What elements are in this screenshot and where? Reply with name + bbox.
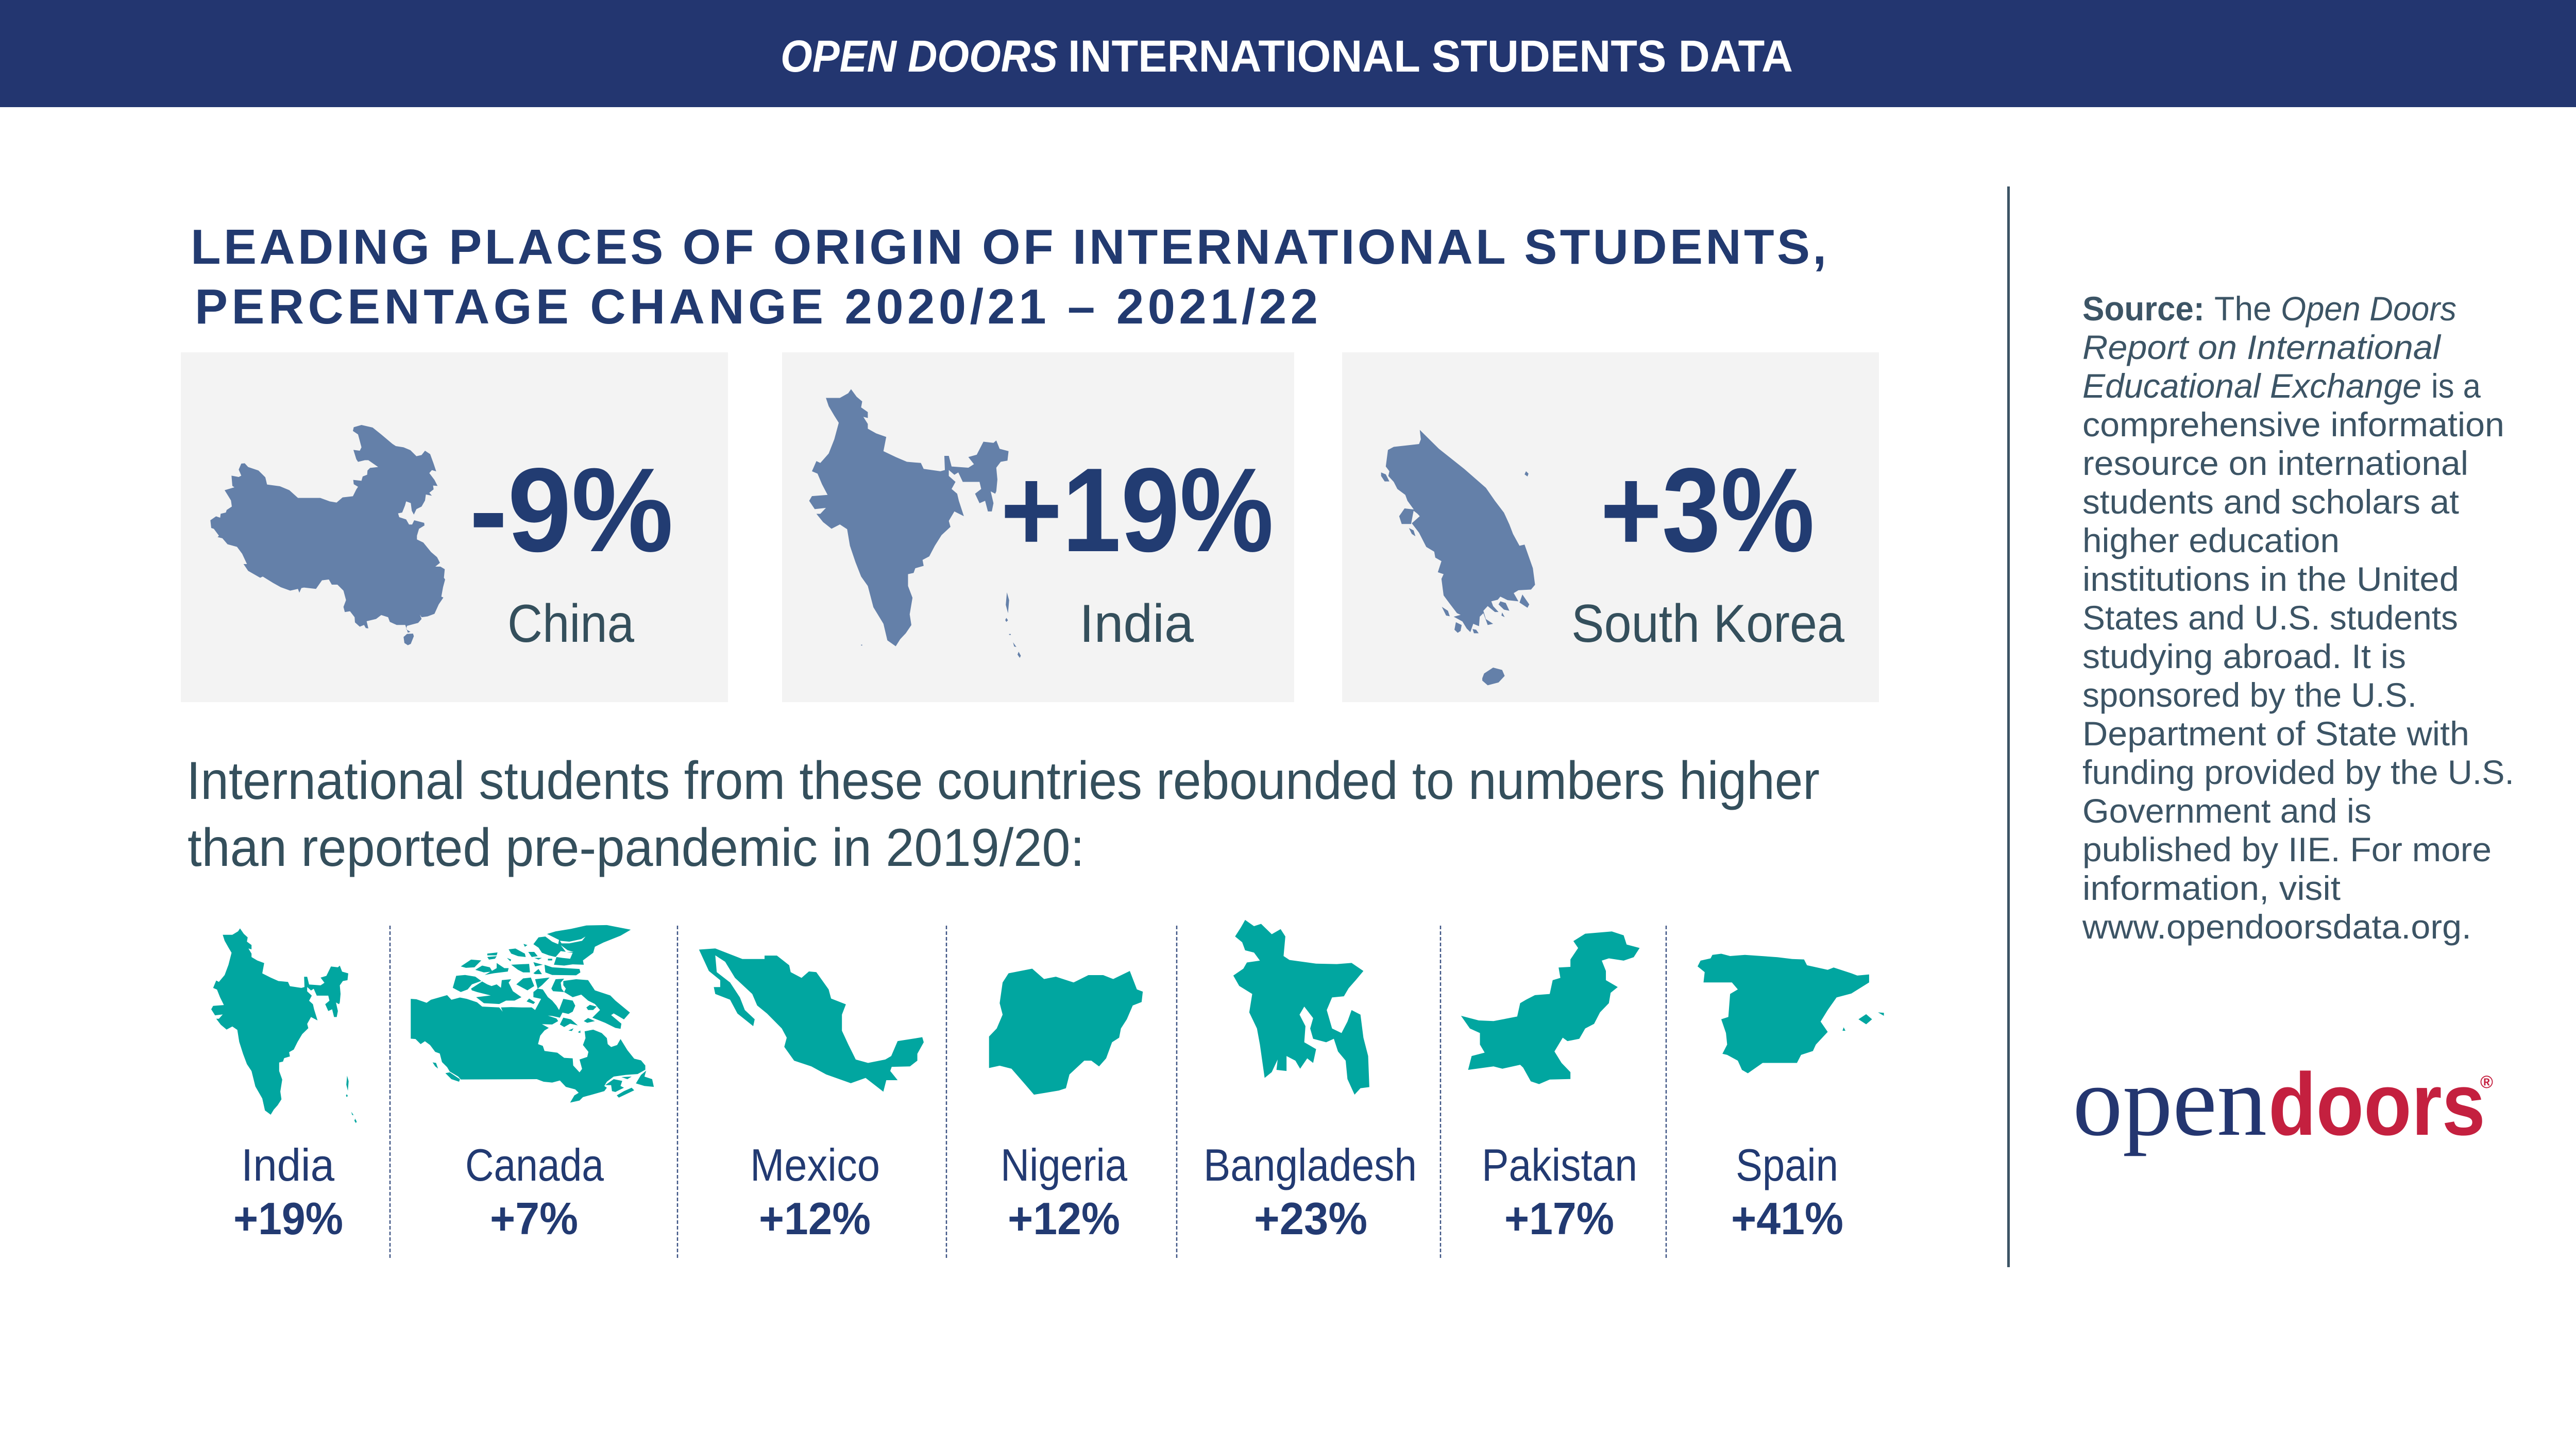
map: Canada [411,925,654,1102]
logo: opendoors: open [2073,1046,2267,1156]
source text: funding provided by the U.S. [2082,753,2514,791]
map: Nigeria [989,969,1143,1095]
country column: Bangladesh: Bangladesh [1204,1139,1417,1190]
source text: States and U.S. students [2082,599,2458,637]
map: China [210,425,445,645]
heading [191,219,1826,334]
source text: Government and is [2082,792,2371,830]
map: India [809,389,1021,658]
map: South Korea [1381,430,1535,685]
panel: South Korea [1342,352,1879,702]
country column: Canada: +7% [490,1193,578,1244]
country column: Bangladesh: +23% [1254,1193,1367,1244]
source text: comprehensive information [2082,405,2504,444]
country column: Pakistan: Pakistan [1482,1139,1637,1190]
source text: published by IIE. For more [2082,830,2492,868]
country column: Canada: Canada [465,1139,604,1190]
heading: LEADING PLACES OF ORIGIN OF INTERNATIONAL STUDENTS, [191,219,1826,275]
source text: Report on International [2082,328,2442,366]
source text: resource on international [2082,444,2468,482]
source text: Open Doors [2281,289,2456,328]
source text: is a [2431,367,2481,405]
intro text [187,751,1820,878]
map: India small [211,928,357,1123]
country column: Canada [411,925,654,1244]
country column: Spain: +41% [1731,1193,1843,1244]
source text: information, visit [2082,869,2341,907]
country column: India: India [241,1139,334,1190]
header banner [0,0,2576,107]
source text: www.opendoorsdata.org. [2082,908,2471,946]
map: Spain [1698,954,1884,1073]
map: Mexico [699,948,924,1092]
country column: Spain: Spain [1736,1139,1838,1190]
source text: institutions in the United [2082,560,2459,598]
country column: Pakistan [1461,931,1639,1244]
logo: opendoors: ® [2480,1072,2493,1092]
header banner: OPEN DOORS [781,31,1058,81]
source text: students and scholars at [2082,483,2459,521]
country column: India [211,928,357,1244]
header banner: INTERNATIONAL STUDENTS DATA [1068,31,1793,81]
stat: +3%: +3% [1600,444,1815,577]
country column: Nigeria: +12% [1008,1193,1120,1244]
country column: Bangladesh [1204,920,1417,1244]
source text: Department of State with [2082,714,2469,753]
intro text: than reported pre-pandemic in 2019/20: [188,818,1084,878]
logo: opendoors [2073,1046,2493,1156]
label: India: India [1079,594,1194,654]
source text: studying abroad. It is [2082,637,2406,675]
source text: The [2214,289,2272,328]
map: Pakistan [1461,931,1639,1084]
intro text: International students from these countries rebounded to numbers higher [187,751,1820,811]
stat: +19%: +19% [1001,444,1274,577]
country column: Nigeria: Nigeria [1001,1139,1127,1190]
panel: China [181,352,728,702]
country column: India: +19% [233,1193,343,1244]
source text: Educational Exchange [2082,367,2421,405]
country column: Pakistan: +17% [1504,1193,1614,1244]
panel: India [782,352,1294,702]
heading: PERCENTAGE CHANGE 2020/21 – 2021/22 [195,279,1318,334]
source text [2082,289,2514,946]
source text: higher education [2082,521,2340,559]
country column: Mexico: +12% [759,1193,871,1244]
stat: -9%: -9% [469,444,673,577]
country column: Mexico [699,948,924,1244]
source text: sponsored by the U.S. [2082,676,2417,714]
country column: Spain [1698,954,1884,1244]
map: Bangladesh [1233,920,1369,1095]
country column: Mexico: Mexico [750,1139,880,1190]
label: China: China [507,594,634,654]
country column: Nigeria [989,969,1143,1244]
source text: Source: [2082,289,2205,328]
logo: opendoors: doors [2268,1055,2485,1154]
label: South Korea: South Korea [1571,594,1844,654]
